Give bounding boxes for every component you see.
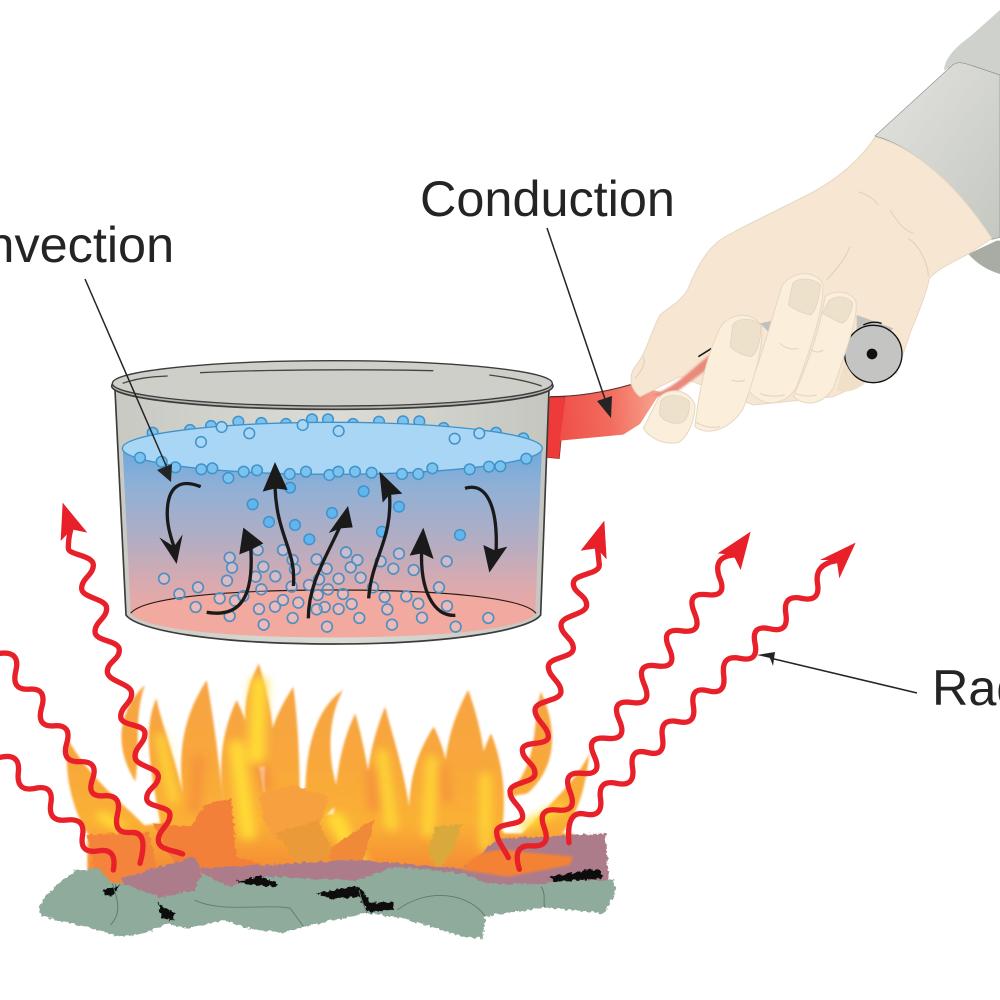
finger three bbox=[748, 274, 823, 403]
leader arrow: radiation bbox=[757, 652, 917, 693]
pot floor rim line bbox=[131, 590, 536, 613]
finger two bbox=[695, 315, 762, 431]
pot rim bbox=[112, 361, 553, 409]
right wave one bbox=[497, 521, 607, 858]
pot of boiling water bbox=[112, 361, 553, 644]
black cracks bbox=[103, 868, 602, 920]
mottled flame base bbox=[87, 785, 462, 887]
hot coals orange bbox=[462, 850, 573, 877]
flame orange core bbox=[195, 760, 447, 810]
back surface bubbles bbox=[147, 414, 529, 444]
radiation waves bbox=[0, 503, 183, 870]
right wave two bbox=[517, 532, 751, 869]
left wave three bbox=[0, 756, 114, 870]
leader arrow: conduction bbox=[547, 228, 612, 418]
label: conduction: Conduction bbox=[420, 170, 675, 227]
hand holding the handle bbox=[631, 137, 992, 443]
pot handle bbox=[547, 384, 661, 459]
right wave three bbox=[569, 543, 856, 843]
leader arrow: convection bbox=[85, 279, 172, 482]
palm bbox=[631, 137, 992, 405]
finger four bbox=[793, 292, 856, 403]
rock outlines bbox=[110, 883, 545, 927]
left wave one bbox=[61, 503, 183, 854]
handle bracket bbox=[547, 397, 565, 459]
flame yellow highlights bbox=[103, 683, 562, 867]
handle strip bbox=[560, 384, 661, 441]
handle metal bbox=[760, 315, 893, 337]
water surface bbox=[122, 422, 542, 474]
palm heel over knob bbox=[837, 362, 865, 392]
rising blue bubbles bbox=[247, 482, 465, 545]
hand creases bbox=[635, 192, 928, 378]
left wave two bbox=[0, 653, 143, 863]
pot body bbox=[115, 390, 549, 644]
green rocks bbox=[40, 867, 615, 938]
handle top edge bbox=[550, 385, 631, 397]
knuckle lines bbox=[695, 343, 823, 427]
flames bbox=[67, 663, 589, 887]
convection arrows bbox=[159, 462, 507, 618]
pot floor bbox=[131, 590, 536, 637]
mauve embers bbox=[122, 833, 610, 903]
water body bbox=[123, 447, 542, 637]
surface bubbles bbox=[135, 420, 532, 483]
flames and burning rocks bbox=[40, 663, 615, 938]
handle edge bbox=[698, 348, 712, 357]
fingernails bbox=[659, 279, 853, 423]
hot handle seen through the hand bbox=[650, 353, 715, 398]
lower pale bubbles bbox=[159, 545, 494, 632]
sleeve and cuff bbox=[875, 10, 1000, 274]
handle end knob bbox=[845, 322, 902, 383]
finger one bbox=[643, 391, 695, 443]
